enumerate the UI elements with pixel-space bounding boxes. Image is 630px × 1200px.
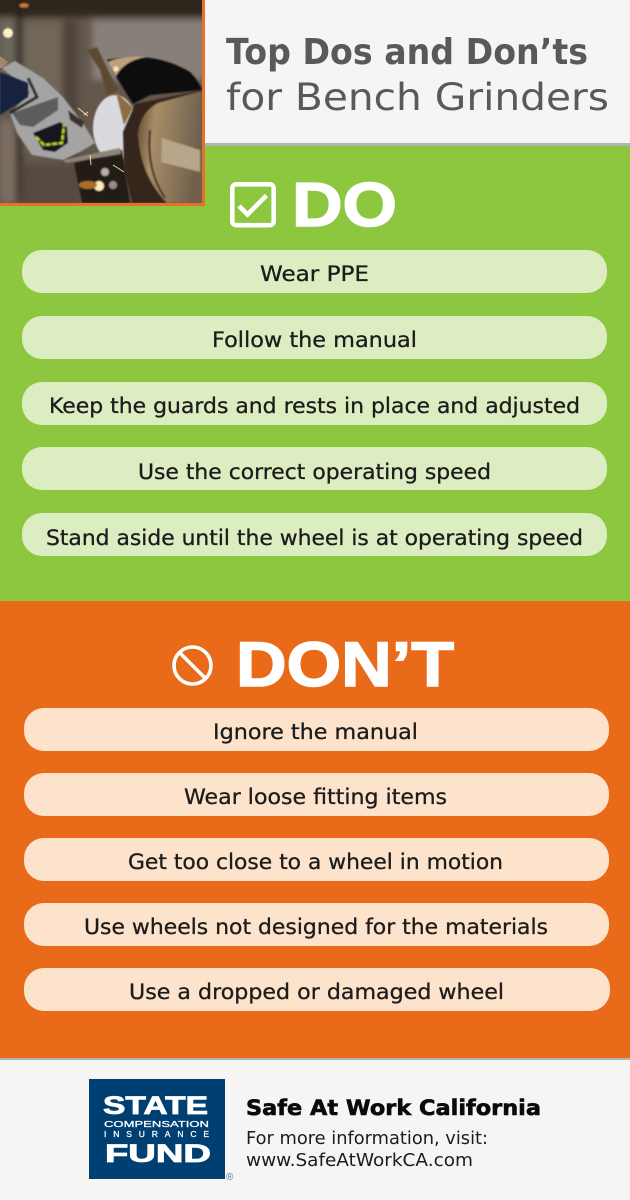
footer text: www.SafeAtWorkCA.com (246, 1150, 473, 1171)
list: don't items: Use wheels not designed for the materials (84, 915, 548, 939)
title (226, 32, 609, 119)
panel: DO (0, 143, 630, 601)
footer text: For more information, visit: (246, 1128, 488, 1149)
photo: bench grinder with gloved hand (0, 0, 212, 208)
list: do items: Keep the guards and rests in place and adjusted (49, 394, 580, 418)
title: for Bench Grinders (226, 76, 609, 119)
icon: checkbox (232, 184, 274, 225)
logo: State Compensation Insurance Fund (89, 1079, 234, 1183)
footer text (246, 1096, 541, 1171)
sparks (78, 108, 124, 172)
list: don't items (24, 708, 610, 1011)
background lights (3, 28, 13, 38)
glove (2, 61, 95, 160)
grinding wheel (93, 95, 137, 161)
lower hardware (63, 148, 130, 203)
list: don't items: Get too close to a wheel in motion (128, 850, 503, 874)
list: do items: Use the correct operating speed (138, 460, 491, 484)
logo: State Compensation Insurance Fund: INSURANCE (104, 1129, 209, 1139)
list: don't items: Wear loose fitting items (184, 785, 447, 809)
list: do items: Follow the manual (212, 328, 417, 352)
list: do items: Stand aside until the wheel is at operating speed (46, 526, 583, 550)
logo: State Compensation Insurance Fund: COMPENSATION (104, 1119, 209, 1129)
heading: DON'T: DON’T (236, 630, 454, 700)
logo: State Compensation Insurance Fund: FUND (105, 1140, 211, 1168)
list: don't items: Ignore the manual (213, 720, 418, 744)
wheel guard (87, 47, 202, 125)
list: do items: Wear PPE (260, 262, 369, 286)
sleeve (0, 72, 28, 115)
list: do items (22, 250, 607, 556)
footer text: Safe At Work California (246, 1096, 541, 1120)
icon: prohibition sign (174, 647, 211, 684)
grinder motor (123, 90, 202, 203)
heading: DO: DO (292, 171, 397, 240)
footer divider (0, 1058, 630, 1060)
panel: DON'T (0, 601, 630, 1058)
logo: State Compensation Insurance Fund: ® (226, 1172, 234, 1183)
list: don't items: Use a dropped or damaged wheel (129, 980, 504, 1004)
title: Top Dos and Don’ts (226, 32, 588, 73)
logo: State Compensation Insurance Fund: STATE (103, 1092, 208, 1120)
